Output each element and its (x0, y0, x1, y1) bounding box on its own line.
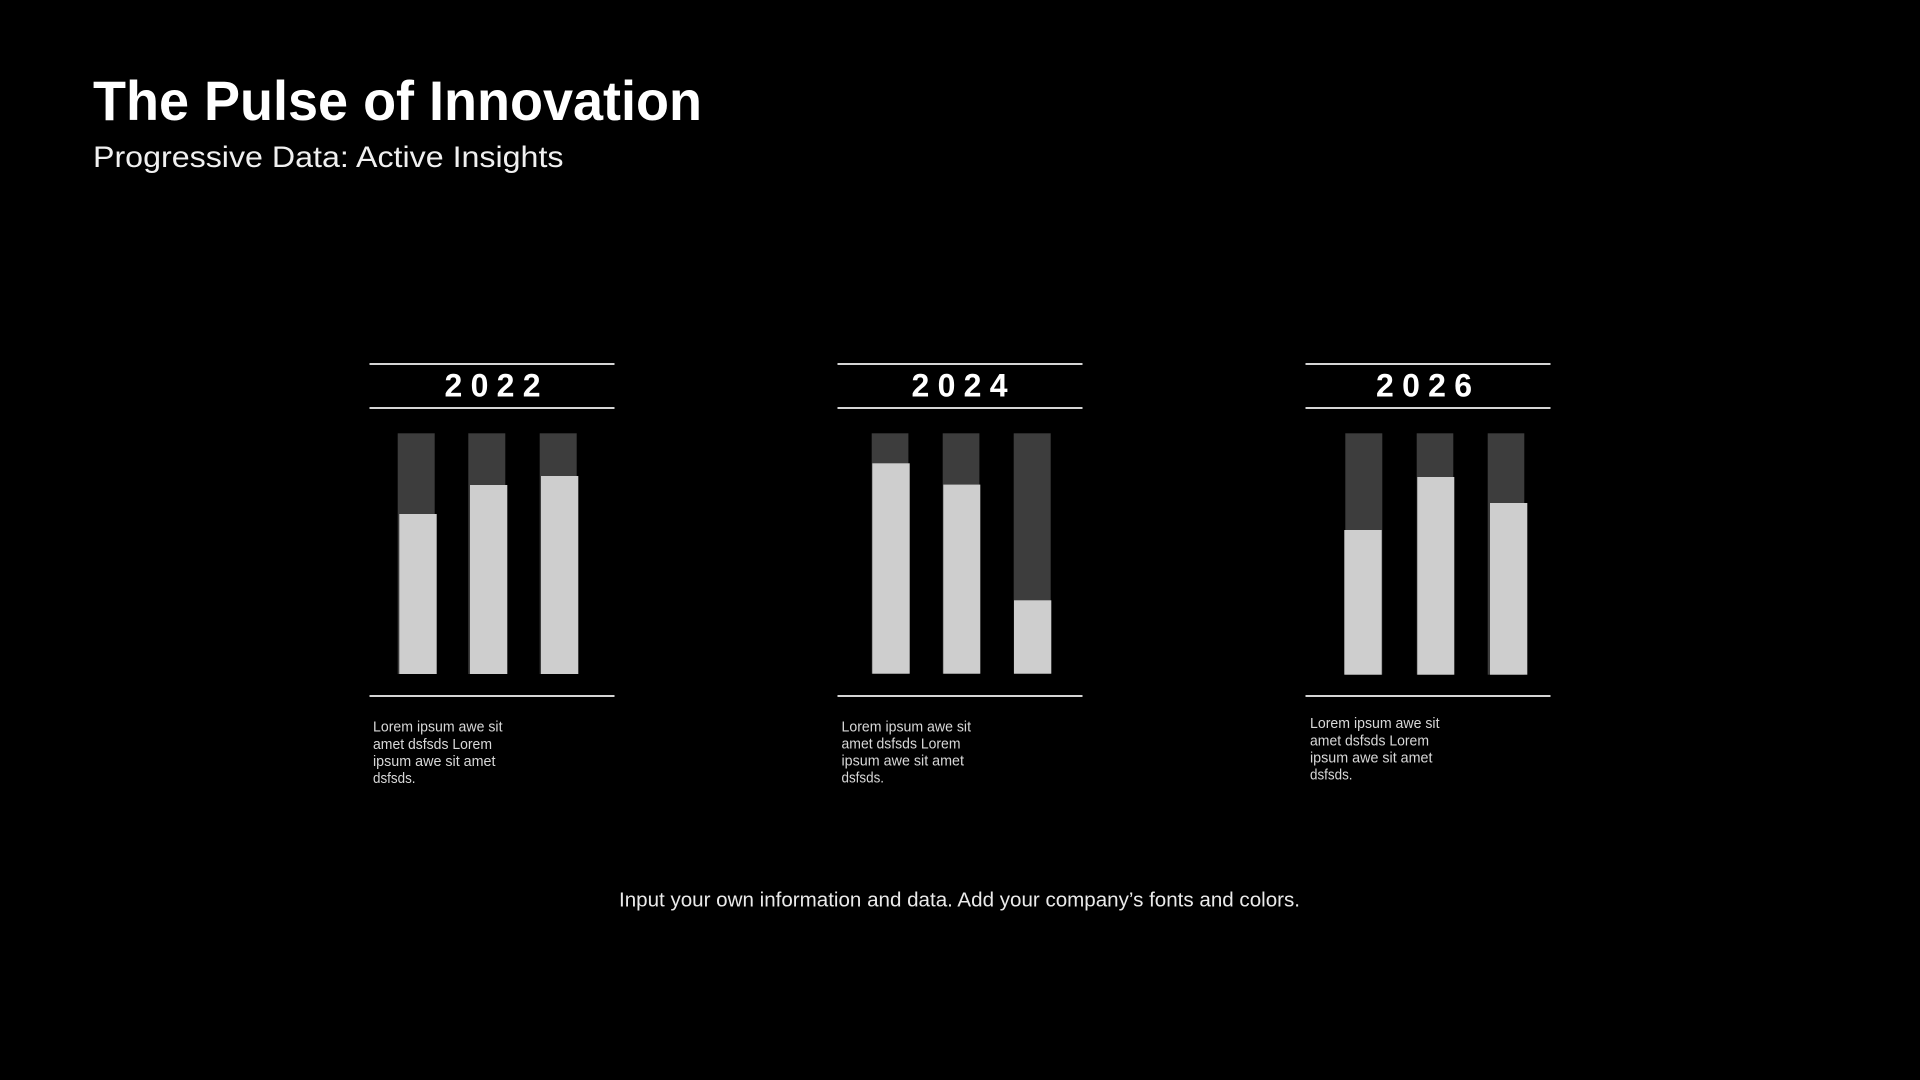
panel: 2024 (838, 363, 1082, 787)
footer note: Input your own information and data. Add your company’s fonts and colors. (619, 890, 1300, 912)
bar chart: 2024 (872, 433, 1051, 674)
bar chart: 2026 (1344, 433, 1527, 675)
text block: 2024 description: ipsum awe sit amet (842, 754, 964, 770)
text block: 2024 description (842, 719, 971, 787)
bar chart: 2022 (398, 433, 578, 674)
text block: 2024 description: dsfsds. (842, 771, 884, 787)
text block: 2026 description: dsfsds. (1310, 767, 1352, 783)
text block: 2022 description: Lorem ipsum awe sit (373, 720, 502, 736)
text block: 2024 description: Lorem ipsum awe sit (842, 719, 971, 735)
text block: 2026 description: amet dsfsds Lorem (1310, 733, 1429, 749)
text block: 2022 description: amet dsfsds Lorem (373, 737, 492, 753)
text block: 2022 description: ipsum awe sit amet (373, 754, 496, 770)
text block: 2026 description (1310, 716, 1440, 783)
subtitle: Progressive Data: Active Insights (93, 141, 564, 174)
text block: 2026 description: ipsum awe sit amet (1310, 750, 1432, 766)
panel: 2026 (1306, 363, 1550, 783)
year label: 2024: 2024 (912, 368, 1008, 404)
year label: 2026: 2026 (1376, 368, 1472, 404)
panel: 2022 (370, 363, 614, 787)
year label: 2022: 2022 (444, 368, 540, 404)
text block: 2022 description (373, 720, 502, 787)
title: The Pulse of Innovation (93, 69, 702, 132)
text block: 2026 description: Lorem ipsum awe sit (1310, 716, 1440, 732)
text block: 2024 description: amet dsfsds Lorem (842, 737, 960, 753)
text block: 2022 description: dsfsds. (373, 771, 416, 787)
